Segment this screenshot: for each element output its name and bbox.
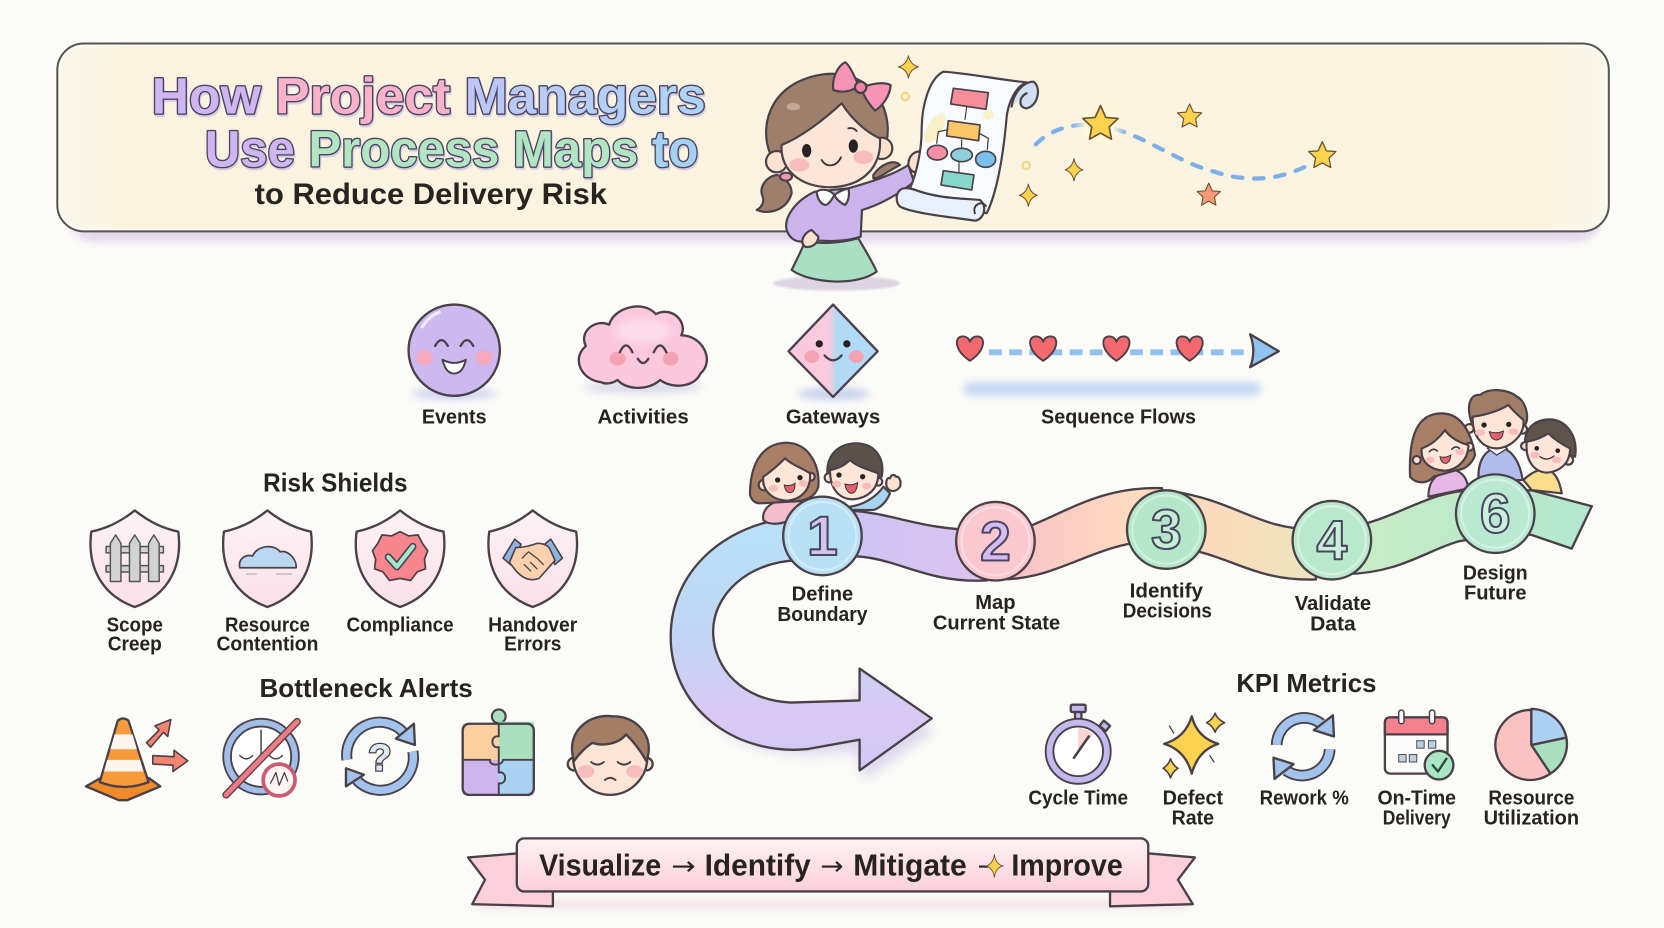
label: Delivery: [1383, 807, 1451, 830]
shield: compliance: [346, 510, 454, 636]
title: Use Process Maps to: [205, 121, 698, 178]
face: [782, 103, 880, 187]
label: Rate: [1172, 807, 1214, 830]
label: Cycle Time: [1028, 786, 1128, 809]
label: Utilization: [1484, 807, 1579, 830]
step 2: 2: [980, 510, 1011, 572]
title: to Reduce Delivery Risk: [255, 178, 608, 211]
label: Map: [975, 591, 1016, 614]
heading: bottleneck alerts: Bottleneck Alerts: [259, 673, 473, 703]
label: Defect: [1163, 786, 1223, 809]
slogan: →: [820, 851, 844, 881]
mouth: [822, 157, 841, 165]
label: gateways: Gateways: [786, 405, 880, 428]
label: Design: [1463, 561, 1528, 584]
segment 1-2: [849, 510, 987, 581]
title: How Project Managers: [152, 68, 706, 125]
kpi: cycle time: [1028, 705, 1128, 809]
icon: puzzle: [463, 709, 534, 795]
label: events: Events: [422, 405, 487, 428]
collar: [817, 190, 834, 205]
label: Resource: [1488, 786, 1574, 809]
slogan: Identify: [705, 848, 811, 883]
slogan: Visualize: [539, 848, 661, 883]
kpi: defect rate: [1163, 713, 1225, 830]
sparkle: [986, 854, 1003, 878]
label: Identify: [1130, 579, 1203, 602]
label: Scope: [107, 613, 163, 636]
element: gateways: [786, 305, 880, 428]
step 1: [777, 497, 868, 626]
kpi: rework: [1260, 715, 1349, 809]
illustration: girl holding process map: [757, 62, 924, 291]
heading: risk shields: Risk Shields: [263, 467, 408, 497]
step 2: [933, 502, 1060, 634]
cheeks: [789, 158, 809, 172]
element: sequence flows: [957, 334, 1279, 428]
skirt: [792, 238, 877, 282]
gold stars: [898, 56, 1336, 206]
hearts: [957, 336, 1203, 361]
hair: [766, 74, 888, 160]
body with raised arm: [786, 165, 914, 242]
process path arrow: [671, 517, 934, 780]
kid: girl: [763, 498, 803, 524]
person: boy: [1523, 470, 1562, 493]
slogan: Improve: [1011, 848, 1123, 883]
slogan: [539, 848, 1123, 883]
label: Errors: [504, 633, 561, 656]
eyes: [802, 144, 811, 157]
label: Boundary: [777, 603, 868, 626]
shield: resource contention: [216, 510, 318, 656]
step 1: 1: [807, 505, 838, 567]
step 4: 4: [1316, 509, 1347, 571]
header banner: [57, 44, 1609, 242]
title: [152, 68, 706, 211]
label: On-Time: [1377, 786, 1456, 809]
slogan: →: [977, 851, 1001, 881]
segment 2-3: [1003, 488, 1162, 579]
kpi: on-time delivery: [1377, 710, 1456, 830]
segment 3-4: [1173, 491, 1316, 580]
question mark: ?: [368, 736, 392, 779]
label: Contention: [216, 633, 318, 656]
hands: [908, 151, 924, 172]
shield: handover errors: [488, 510, 577, 656]
scroll with flow chart: [897, 72, 1038, 221]
shield: scope creep: [90, 510, 179, 656]
kid: boy arm: [850, 487, 890, 510]
label: Validate: [1295, 592, 1371, 615]
label: Define: [792, 583, 853, 606]
label: Resource: [225, 613, 310, 636]
step 4: [1293, 501, 1371, 635]
label: Data: [1310, 612, 1356, 635]
ribbon body: [517, 838, 1148, 891]
bow: [833, 62, 858, 92]
label: Current State: [933, 611, 1060, 634]
dashed flow with stars: [898, 56, 1336, 206]
kid: boy hand: [886, 475, 901, 491]
bottom ribbon banner: [468, 838, 1195, 908]
process ribbon: [849, 488, 1592, 581]
icon: clock with slash: [226, 722, 297, 796]
ribbon tails: [468, 853, 553, 906]
person: man: [1478, 448, 1523, 480]
slogan: Mitigate: [853, 848, 967, 883]
heading: kpi metrics: KPI Metrics: [1236, 668, 1376, 698]
icon: question loop: [346, 722, 415, 790]
team: two kids at start: [750, 443, 901, 524]
label: Decisions: [1123, 600, 1212, 623]
label: Handover: [488, 613, 577, 636]
kid: boy head: [827, 443, 882, 477]
arrow head: [1250, 334, 1279, 367]
near pigtail: [757, 175, 792, 212]
icon: sleepy face: [568, 716, 653, 795]
label: Future: [1464, 582, 1527, 605]
step 6: 6: [1480, 483, 1511, 545]
slogan: →: [671, 851, 696, 881]
step 6: [1456, 474, 1535, 605]
ears: [766, 151, 787, 172]
shadow under girl: [773, 276, 900, 291]
person: girl: [1428, 470, 1468, 497]
label: sequence flows: Sequence Flows: [1041, 405, 1196, 428]
segment 4-6 and tail: [1346, 490, 1592, 574]
label: Creep: [108, 633, 162, 656]
flow chart nodes: [951, 88, 988, 109]
label: Compliance: [346, 613, 454, 636]
kpi: resource utilization pie: [1484, 709, 1579, 830]
step 3: 3: [1151, 499, 1182, 561]
label: activities: Activities: [597, 405, 689, 428]
icon: traffic cone with arrows: [86, 718, 188, 800]
team: three kids at end: [1410, 390, 1576, 497]
far pigtail: [873, 162, 900, 178]
element: events: [409, 305, 500, 428]
element: activities: [579, 306, 707, 428]
dashes: [989, 350, 1244, 355]
step 3: [1123, 490, 1212, 623]
label: Rework %: [1260, 786, 1349, 809]
